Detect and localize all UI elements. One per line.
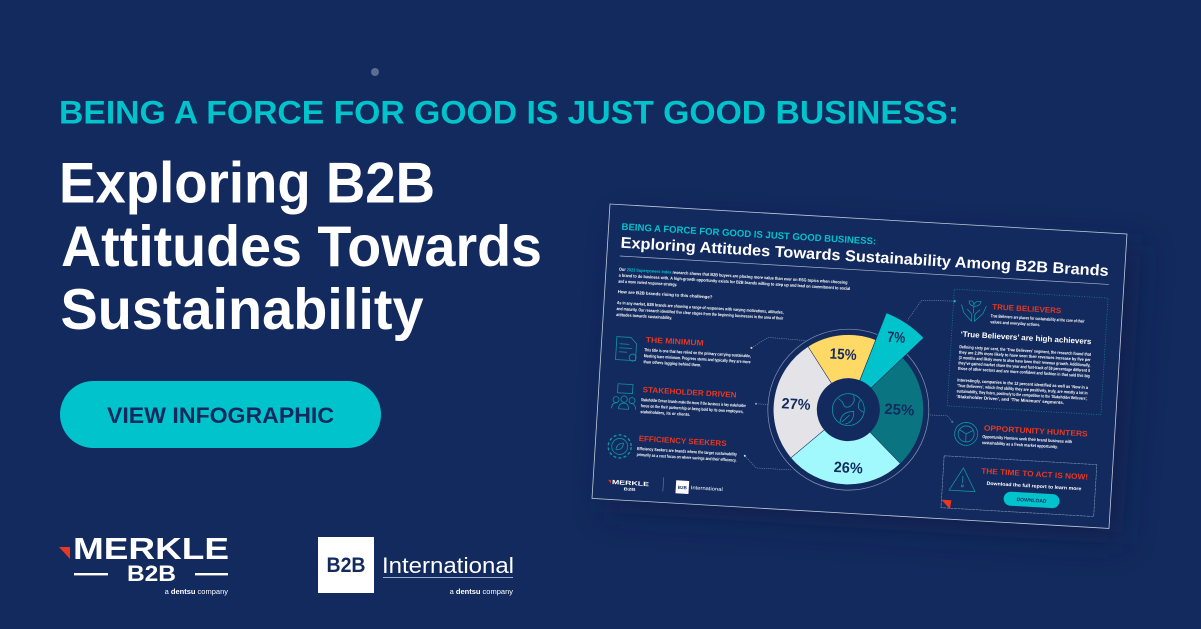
panel: stakeholder driven: Stakeholder Driven brands make the move if the business is key stakeholder	[641, 397, 746, 408]
panel: opportunity hunters: sustainability as a fresh market opportunity.	[982, 440, 1058, 449]
logo: Merkle B2B: a dentsu company	[165, 587, 228, 596]
heading: TRUE BELIEVERS	[992, 302, 1061, 315]
small logos: MERKLE	[612, 480, 649, 488]
preview heading: BEING A FORCE FOR GOOD IS JUST GOOD BUSINESS:	[621, 222, 876, 247]
panel: the minimum: This title is one that has relied on the primary carrying sustainable,	[644, 347, 751, 358]
segment: 7%	[848, 311, 925, 414]
icon: document	[615, 337, 637, 361]
small logos: International	[691, 485, 723, 493]
heading: STAKEHOLDER DRIVEN	[642, 385, 737, 400]
body text: they’ve gained market share the year and fast-track of 59 percentage different it	[958, 360, 1091, 373]
panel: true believers: values and everyday actions.	[990, 319, 1040, 327]
segment: 15%	[804, 332, 876, 411]
logo: B2B International: International	[382, 553, 514, 578]
body text	[956, 344, 1092, 407]
value labels: 27%	[781, 395, 811, 414]
body text: Interestingly, companies in the 12 percent identified as well as ‘Now in a	[957, 377, 1089, 390]
panel: the minimum	[615, 334, 752, 370]
panel: stakeholder driven	[611, 383, 747, 420]
decorative dot	[371, 68, 379, 76]
heading: THE MINIMUM	[645, 335, 704, 348]
download button: DOWNLOAD	[1016, 497, 1047, 505]
heading: EFFICIENCY SEEKERS	[638, 434, 727, 448]
panel: opportunity hunters: Opportunity Hunters seek their brand business with	[982, 434, 1073, 444]
panel: efficiency seekers	[608, 432, 738, 465]
main title	[59, 152, 542, 342]
logo: B2B International: a dentsu company	[450, 587, 513, 596]
centre globe icon	[815, 376, 882, 443]
body text: Defining sixty per cent, the ‘True Believers’ segment, the research found that	[959, 344, 1092, 357]
panel: efficiency seekers: primarily as a cost focus on where savings and their efficiency.	[637, 452, 737, 463]
small logos: B2B	[623, 486, 636, 492]
segment: 26%	[789, 406, 903, 488]
panel: the time to act	[941, 456, 1097, 518]
panel: true believers: True Believers are places for sustainability at the core of their	[991, 313, 1085, 324]
value labels: 7%	[887, 329, 906, 347]
preview title: Exploring Attitudes Towards Sustainability Among B2B Brands	[620, 235, 1109, 280]
panel: true believers	[947, 289, 1108, 415]
subheading: ‘True Believers’ are high achievers	[960, 330, 1092, 346]
intro text: How are B2B brands rising to this challenge?	[618, 289, 713, 300]
value labels	[777, 323, 919, 480]
intro text: attitudes towards sustainability.	[616, 312, 672, 320]
panel: the minimum: Meeting bare minimum. Progress stems and typically they are more	[644, 353, 751, 364]
heading: THE TIME TO ACT IS NOW!	[981, 466, 1088, 482]
button: view infographic: VIEW INFOGRAPHIC	[107, 403, 334, 428]
icon: hands and plant	[960, 300, 987, 322]
panel: the minimum: than others lagging behind them.	[643, 359, 701, 368]
main title: Attitudes Towards	[61, 215, 542, 279]
main title: Sustainability	[60, 278, 424, 342]
intro text: Our 2023 Superpowers Index research shows that B2B buyers are placing more value than ever on ESG topics when choosing	[619, 267, 848, 285]
intro text	[616, 267, 851, 330]
button: view infographic	[60, 381, 381, 448]
icon: gear	[608, 434, 632, 459]
heading: OPPORTUNITY HUNTERS	[984, 424, 1088, 439]
panel: opportunity hunters	[954, 422, 1088, 452]
body text: they are 2.8% more likely to have seen their revenues increase by five per	[959, 350, 1091, 362]
small logos: B2B	[678, 485, 688, 490]
intro text: and a more varied response strategy.	[618, 279, 677, 287]
body text: (3 months and likely more to also have been their revenue growth. Additionally,	[959, 355, 1091, 368]
main title: Exploring B2B	[59, 152, 435, 216]
body text: those of other sectors and are more confident and fashion in that said this big	[958, 366, 1090, 378]
panel: efficiency seekers: Efficiency Seekers are brands where the target sustainability	[637, 446, 738, 457]
infographic preview document	[592, 204, 1127, 528]
icon: warning triangle	[949, 467, 976, 492]
logo: B2B International	[318, 537, 514, 596]
body text: ‘Stakeholder Driven’, and ‘The Minimum’ segments.	[956, 394, 1064, 405]
value labels: 26%	[833, 459, 863, 478]
body text: ‘True Believers’, which find ability they are positively, truly, are mostly a lot in	[957, 383, 1088, 396]
eyebrow heading: BEING A FORCE FOR GOOD IS JUST GOOD BUSINESS:	[59, 94, 959, 130]
intro text: a brand to do business with. A high-growth opportunity exists for B2B brands willing to step up and lead on commitment to social	[619, 273, 850, 291]
small logos	[608, 474, 723, 497]
corner triangle	[941, 500, 951, 509]
logo: Merkle B2B: MERKLE	[73, 532, 229, 566]
segment: 27%	[770, 345, 852, 461]
download button	[1003, 491, 1060, 509]
panel: stakeholder driven: focus on the their partnership or being bold by its own employees,	[641, 403, 744, 414]
icon: people	[612, 383, 637, 410]
body text: sustainability, they listen, positively to the competition to the ‘Stakeholder Believers’,	[956, 388, 1088, 401]
logo: Merkle B2B	[59, 532, 229, 596]
value labels: 25%	[884, 401, 915, 419]
connector lines	[743, 288, 961, 479]
pie chart	[763, 306, 935, 495]
logo: B2B International: B2B	[326, 554, 366, 577]
intro text: As in any market, B2B brands are showing a range of responses with varying motivations, attitudes,	[617, 300, 784, 315]
segment: 25%	[845, 355, 926, 465]
icon: wheel	[954, 422, 978, 446]
panel: the time to act: Download the full report to learn more	[986, 481, 1082, 492]
value labels: 15%	[829, 345, 857, 364]
infographic preview shadow	[604, 222, 1142, 544]
panel: stakeholder driven: stakeholders, its or clients.	[640, 409, 690, 417]
logo: Merkle B2B: B2B	[127, 561, 176, 586]
intro text: and maturity. Our research identified five clear stages from the beginning businesses in the area of their	[616, 306, 784, 321]
